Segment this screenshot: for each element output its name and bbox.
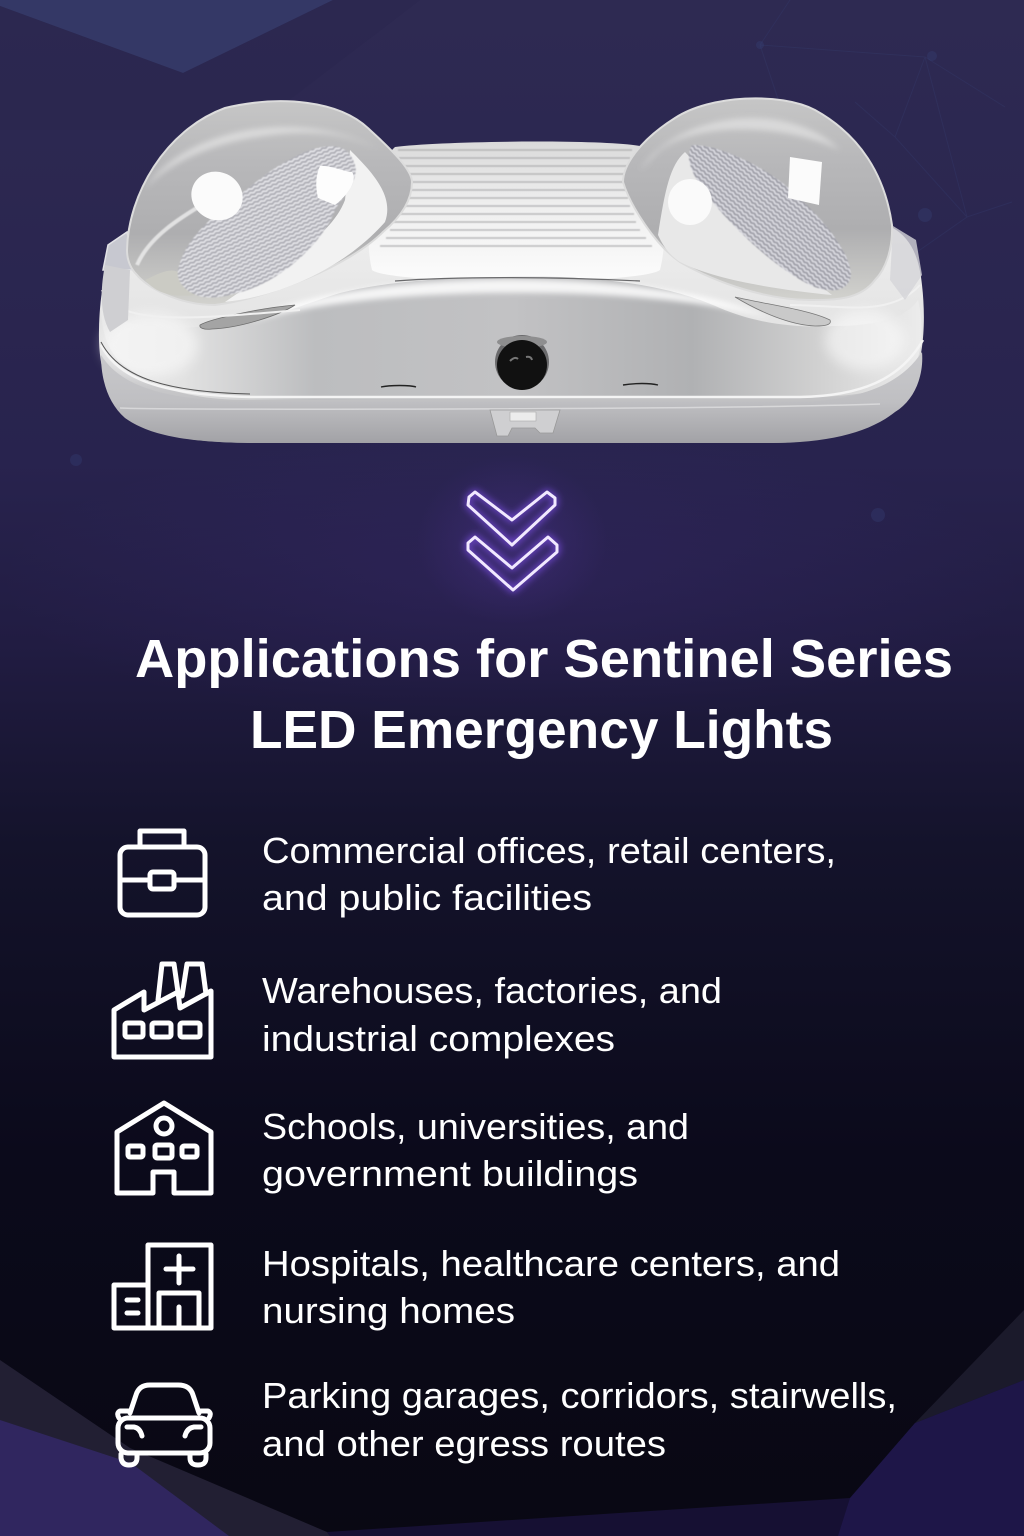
text: education: government buildings	[262, 1153, 638, 1194]
clear outer rim	[102, 285, 920, 317]
product photo: LED emergency light	[99, 98, 924, 443]
text: education: Schools, universities, and	[262, 1106, 689, 1147]
infrared sensor	[495, 335, 549, 390]
text: industrial	[262, 970, 722, 1059]
text: commercial	[262, 830, 836, 918]
item 5: egress	[118, 1375, 897, 1465]
text: industrial: Warehouses, factories, and	[262, 970, 722, 1011]
text: commercial: and public facilities	[262, 877, 592, 918]
text: industrial: industrial complexes	[262, 1018, 615, 1059]
item 1: commercial	[120, 830, 836, 918]
right dome	[623, 98, 892, 300]
text: healthcare	[262, 1243, 840, 1331]
icon: hospital	[114, 1245, 211, 1328]
text: healthcare: Hospitals, healthcare centers, and	[262, 1243, 840, 1284]
title	[135, 629, 953, 760]
left dome	[127, 101, 412, 305]
item 2: industrial	[114, 964, 722, 1059]
title: Applications for Sentinel Series	[135, 629, 953, 689]
icon: briefcase	[120, 831, 205, 915]
down chevrons arrow	[417, 455, 607, 625]
item 4: healthcare	[114, 1243, 840, 1331]
text: education	[262, 1106, 689, 1194]
latch	[490, 410, 560, 436]
icon: car	[118, 1385, 210, 1465]
item 3: education	[117, 1103, 689, 1194]
lamp base silhouette	[99, 190, 924, 443]
text: egress: Parking garages, corridors, stairwells,	[262, 1375, 897, 1416]
ribbed top housing	[369, 142, 665, 281]
icon: factory	[114, 964, 211, 1057]
text: egress: and other egress routes	[262, 1423, 666, 1464]
lower strip	[101, 352, 922, 443]
text: commercial: Commercial offices, retail centers,	[262, 830, 836, 871]
text: egress	[262, 1375, 897, 1464]
silver front panel	[101, 277, 922, 400]
icon: school	[117, 1103, 211, 1193]
text: healthcare: nursing homes	[262, 1290, 515, 1331]
white lamp holder	[225, 150, 387, 302]
slots	[200, 305, 295, 329]
bright reflections	[102, 313, 198, 377]
title: LED Emergency Lights	[250, 700, 833, 760]
